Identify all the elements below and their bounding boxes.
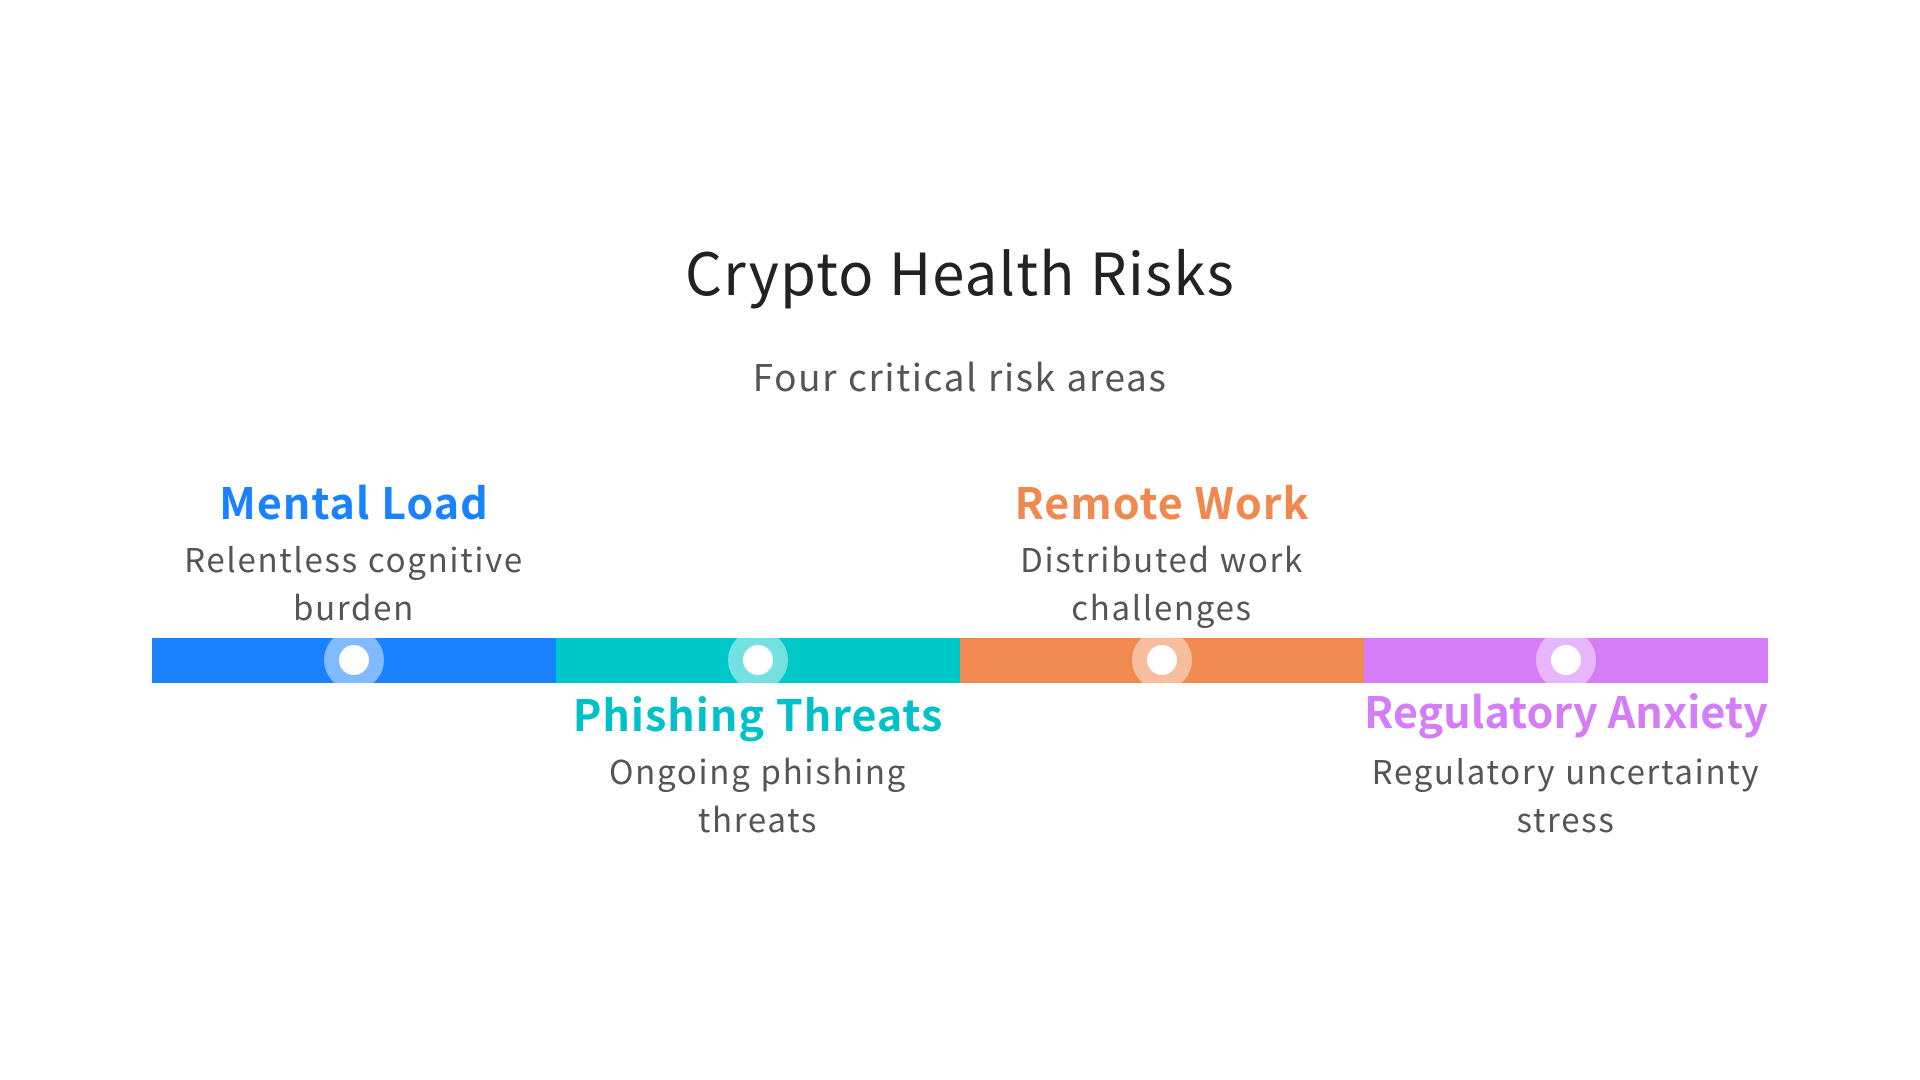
- label: Remote Work: challenges: [1071, 582, 1253, 630]
- label: Mental Load: burden: [293, 582, 415, 630]
- label: Mental Load: Mental Load: [219, 470, 489, 532]
- label: Regulatory Anxiety: Regulatory uncertainty: [1372, 746, 1760, 794]
- label: Remote Work: Distributed work: [1020, 534, 1304, 582]
- segment: mental load: [152, 638, 556, 683]
- segment: regulatory: [1364, 638, 1768, 683]
- label: Remote Work: [1014, 470, 1309, 630]
- label: Regulatory Anxiety: Regulatory Anxiety: [1364, 679, 1768, 741]
- label: Phishing Threats: Phishing Threats: [573, 682, 943, 744]
- label: Mental Load: [184, 470, 524, 630]
- subtitle: Four critical risk areas: [753, 348, 1167, 402]
- segment: phishing: [556, 638, 960, 683]
- label: Regulatory Anxiety: [1364, 679, 1768, 842]
- segment: remote work: [960, 638, 1364, 683]
- label: Phishing Threats: threats: [698, 794, 818, 842]
- title: Crypto Health Risks: [685, 228, 1235, 312]
- label: Mental Load: Relentless cognitive: [184, 534, 524, 582]
- label: Remote Work: Remote Work: [1014, 470, 1309, 532]
- label: Phishing Threats: Ongoing phishing: [609, 746, 907, 794]
- label: Phishing Threats: [573, 682, 943, 842]
- label: Regulatory Anxiety: stress: [1516, 794, 1615, 842]
- timeline bar: [152, 638, 1768, 683]
